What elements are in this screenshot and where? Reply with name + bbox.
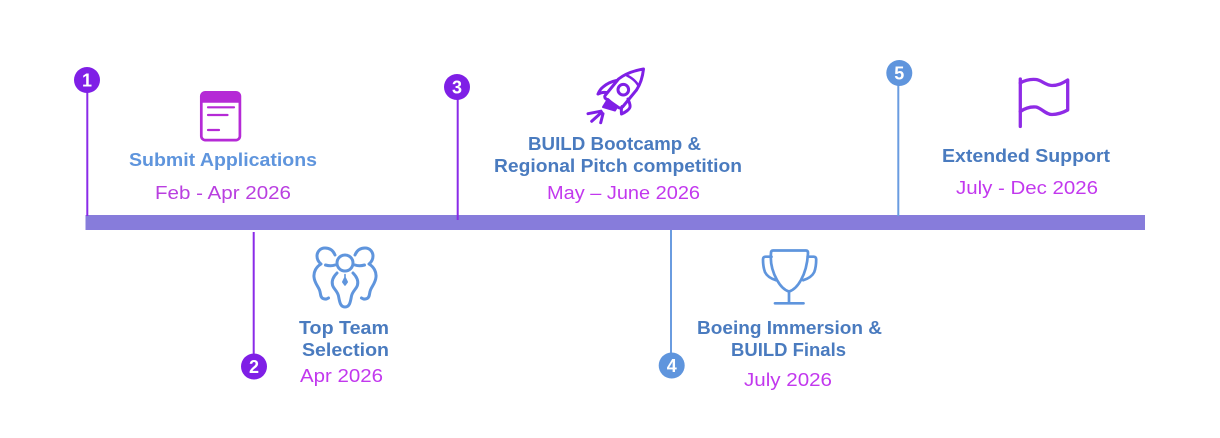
- heading line 2: Selection: [302, 340, 389, 360]
- milestone 2: top team selection: [241, 232, 389, 386]
- date: July - Dec 2026: July - Dec 2026: [956, 178, 1098, 198]
- heading line 2: BUILD Finals: [731, 340, 846, 360]
- marker 5: [886, 60, 912, 216]
- icon: rocket: [588, 69, 644, 123]
- heading: extended support: Extended Support: [942, 146, 1110, 166]
- date: Apr 2026: Apr 2026: [300, 366, 383, 386]
- heading: top team selection: Top Team: [299, 318, 389, 338]
- timeline bar: [86, 215, 1145, 230]
- marker 2: 2: [249, 357, 259, 377]
- heading line 2: Regional Pitch competition: [494, 156, 742, 176]
- date: May – June 2026: May – June 2026: [547, 183, 700, 203]
- milestone 5: extended support: [886, 60, 1110, 216]
- marker 1: 1: [82, 70, 92, 90]
- heading: Boeing Immersion: Boeing Immersion &: [697, 318, 882, 338]
- icon: team: [314, 248, 376, 307]
- milestone 3: bootcamp: [444, 69, 742, 220]
- marker 1: [74, 67, 100, 216]
- marker 3: [444, 74, 470, 220]
- marker 4: 4: [667, 356, 677, 376]
- marker 5: 5: [894, 63, 904, 83]
- heading: submit applications: Submit Applications: [129, 150, 317, 170]
- heading: BUILD Bootcamp: BUILD Bootcamp &: [528, 134, 701, 154]
- icon: trophy: [763, 250, 816, 303]
- date: July 2026: July 2026: [744, 370, 832, 390]
- milestone 4: finals: [659, 230, 882, 390]
- marker 3: 3: [452, 77, 462, 97]
- marker 4: [659, 230, 685, 378]
- icon: application form: [201, 92, 240, 140]
- milestone 1: submit applications: [74, 67, 317, 216]
- marker 2: [241, 232, 267, 380]
- date: Feb - Apr 2026: Feb - Apr 2026: [155, 183, 291, 203]
- icon: flag: [1020, 79, 1068, 126]
